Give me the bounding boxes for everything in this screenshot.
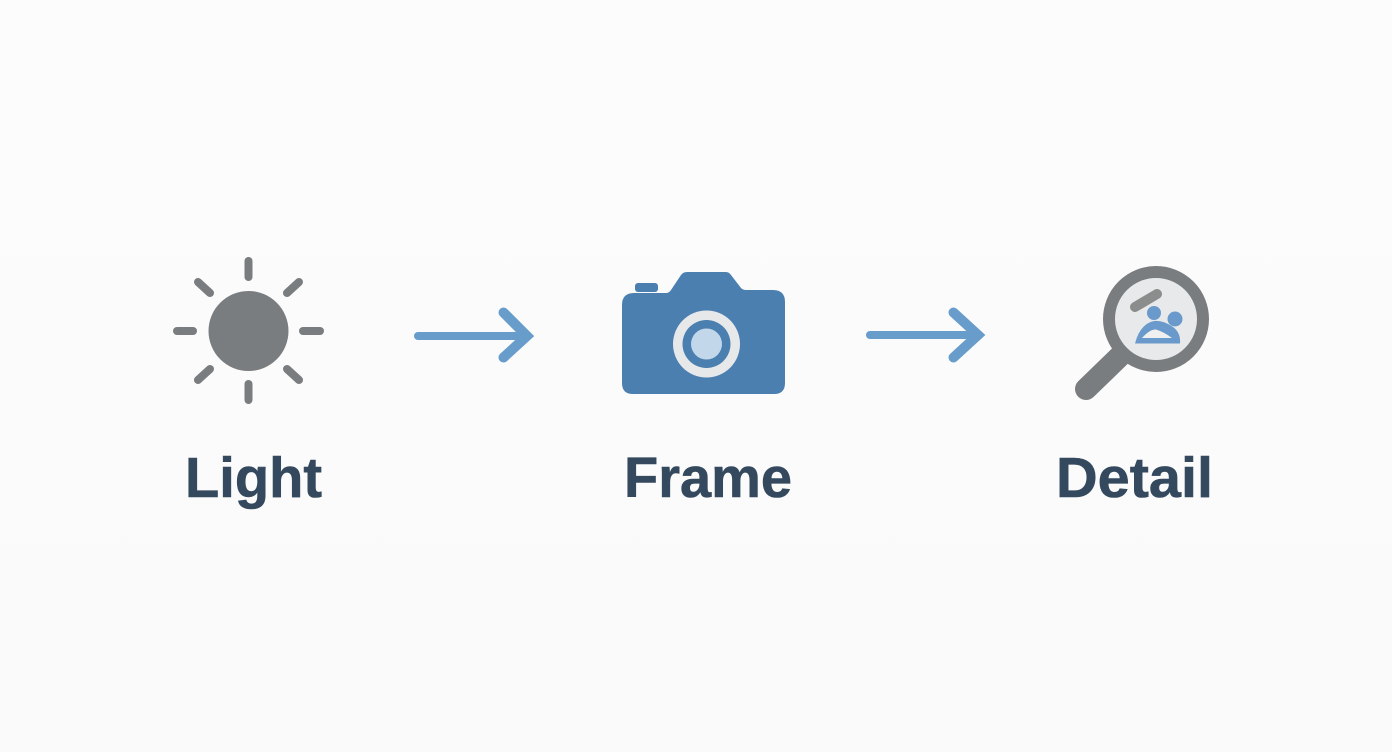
icon: sun [177,261,320,400]
arrow: frame to detail [870,312,978,358]
icon: camera [622,272,785,394]
label: Frame: Frame [624,446,792,510]
arrow: light to frame [418,312,527,358]
label: Light: Light [185,446,322,510]
label: Detail: Detail [1056,446,1213,510]
icon: magnifying glass [1086,272,1203,389]
